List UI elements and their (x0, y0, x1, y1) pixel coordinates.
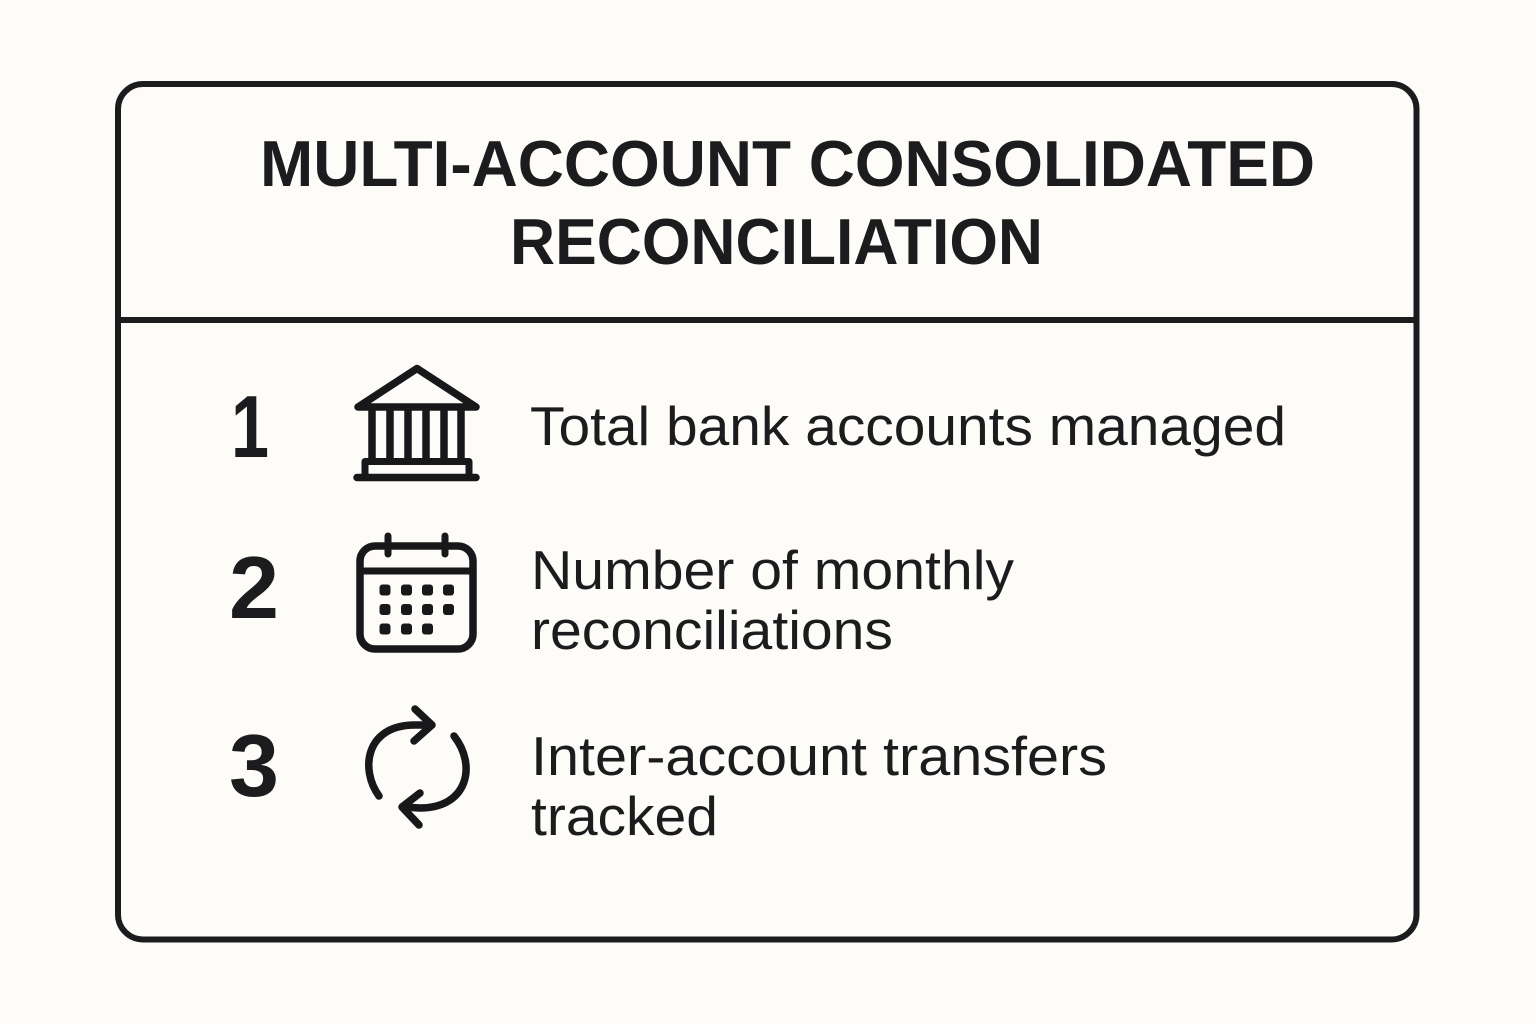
row 1: bank accounts (231, 368, 1286, 478)
title: MULTI-ACCOUNT CONSOLIDATED (260, 127, 1315, 200)
row 2: monthly reconciliations (229, 536, 1015, 661)
description: inter-account transfers (531, 725, 1107, 847)
description: inter-account transfers: Inter-account transfers (531, 725, 1107, 787)
icon: calendar (360, 536, 473, 649)
title: RECONCILIATION (510, 205, 1043, 278)
number 1: 1 (231, 377, 269, 476)
description: monthly reconciliations (531, 539, 1015, 661)
description: monthly reconciliations: Number of monthly (531, 539, 1015, 601)
description: monthly reconciliations: reconciliations (531, 599, 893, 661)
icon: circular arrows (369, 709, 466, 825)
description: inter-account transfers: tracked (531, 785, 718, 847)
description: total bank accounts: Total bank accounts managed (530, 395, 1286, 457)
panel: card frame (118, 84, 1416, 940)
number 2: 2 (229, 538, 279, 637)
number 3: 3 (229, 716, 279, 815)
icon: bank (357, 368, 476, 478)
row 3: inter-account transfers (229, 709, 1107, 847)
title (260, 127, 1315, 278)
